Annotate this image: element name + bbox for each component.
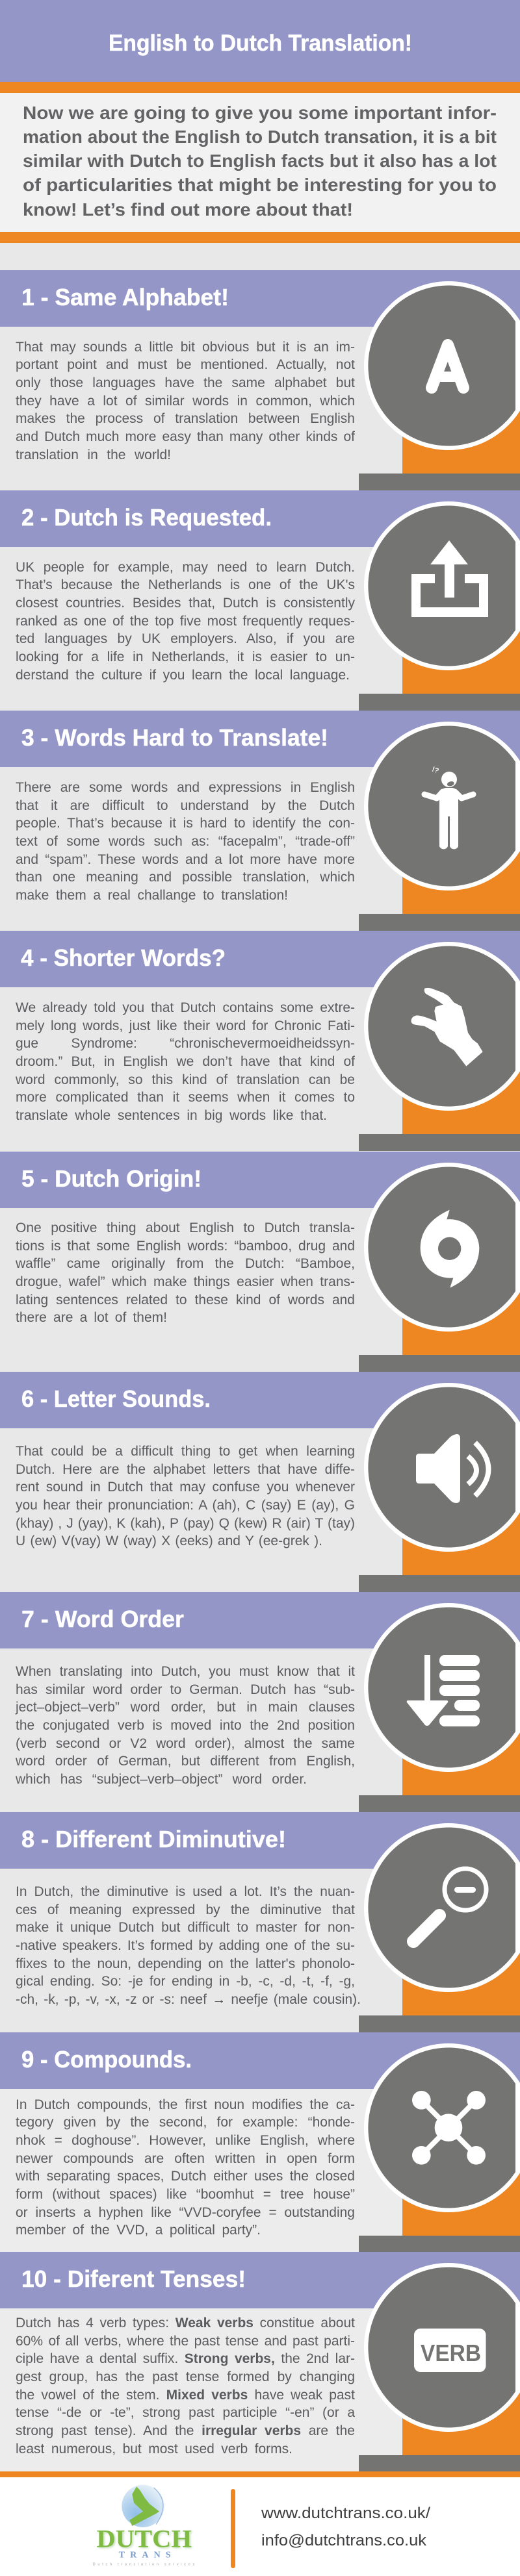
header bar 7 bbox=[0, 1592, 520, 1648]
gray base 2 bbox=[359, 694, 520, 711]
icon: pinching hand bbox=[364, 942, 520, 1111]
logo: Dutch Trans bbox=[93, 2485, 195, 2566]
body text 1: and Dutch much more easy than many other kinds of bbox=[16, 429, 355, 444]
body text 7: ject–object–verb” word order, but in main clauses bbox=[16, 1700, 355, 1715]
gray base 3 bbox=[359, 914, 520, 931]
body text 10: ciple have a dental suffix. Strong verbs, the 2nd lar- bbox=[16, 2351, 355, 2366]
body text 5: lating sentences related to these kind of words and bbox=[16, 1293, 355, 1307]
body text 9: newer compounds are often written in open form bbox=[16, 2151, 355, 2166]
icon: upload bbox=[364, 501, 520, 670]
header bar 10 bbox=[0, 2252, 520, 2308]
body text 7 bbox=[16, 1664, 355, 1787]
icon: magnifier minus bbox=[364, 1823, 520, 1992]
body text 8: make it unique Dutch but difficult to master for non- bbox=[16, 1920, 355, 1935]
body text 6: you hear their pronunciation: A (ah), C (say) E (ay), G bbox=[16, 1498, 355, 1513]
intro text: mation about the English to Dutch transation, it is a bit bbox=[23, 127, 497, 147]
orange pedestal 7 bbox=[402, 1683, 520, 1795]
body text 8: -ch, -k, -p, -v, -x, -z or -s: neef → neefje (male cousin). bbox=[16, 1992, 361, 2007]
body text 1: makes the process of translation between English bbox=[16, 411, 355, 426]
body text 4: We already told you that Dutch contains some extre- bbox=[16, 1000, 355, 1015]
body text 4: translate whole sentences in big words like that. bbox=[16, 1108, 327, 1123]
body text 6: That could be a difficult thing to get when learning bbox=[16, 1444, 355, 1459]
panel: 2 dutch is requested bbox=[0, 490, 520, 711]
title banner bbox=[0, 0, 520, 82]
body text 6 bbox=[16, 1444, 355, 1548]
intro text bbox=[23, 103, 497, 220]
body text 9: tegory given by the second, for example: “honde- bbox=[16, 2115, 355, 2130]
body text 4: word commonly, so this kind of translation can be bbox=[16, 1072, 355, 1087]
orange pedestal 1 bbox=[402, 361, 520, 474]
panel: 10 different tenses bbox=[0, 2252, 520, 2472]
body text 1: portant point and must be mentioned. Actually, not bbox=[16, 357, 355, 372]
contact details: www.dutchtrans.co.uk/ bbox=[261, 2505, 430, 2522]
body text 9: form (without spaces) like “boomhut = tree house” bbox=[16, 2187, 355, 2202]
body text 10: least numerous, but most used verb forms. bbox=[16, 2442, 292, 2456]
body text 6: U (ew) V(vay) W (way) X (eeks) and Y (ee-grek ). bbox=[16, 1534, 322, 1548]
body text 10: gest group, has the past tense formed by changing bbox=[16, 2369, 355, 2384]
logo: Dutch Trans: DUTCH bbox=[96, 2525, 192, 2553]
heading 7: 7 - Word Order bbox=[21, 1606, 184, 1632]
body text 8: gical ending. So: -je for ending in -b, -c, -d, -t, -f, -g, bbox=[16, 1974, 355, 1989]
intro text: Now we are going to give you some important infor- bbox=[23, 103, 497, 123]
heading 10: 10 - Diferent Tenses! bbox=[21, 2266, 246, 2292]
heading 3: 3 - Words Hard to Translate! bbox=[21, 724, 328, 751]
body text 2: ranked as one of the top five most frequently reques- bbox=[16, 614, 355, 629]
body text 8: -native speakers. It’s formed by adding one of the su- bbox=[16, 1938, 355, 1953]
body text 7: which has “subject–verb–object” word order. bbox=[16, 1772, 307, 1787]
body text 10: 60% of all verbs, where the past tense and past parti- bbox=[16, 2334, 355, 2349]
icon: speaker bbox=[364, 1383, 520, 1552]
body text 9: nhok = doghouse”. However, unlike English, where bbox=[16, 2133, 355, 2148]
intro text: of particularities that might be interesting for you to bbox=[23, 175, 497, 195]
gray base 8 bbox=[359, 2015, 520, 2032]
body text 3 bbox=[16, 780, 355, 903]
orange pedestal 3 bbox=[402, 802, 520, 914]
icon: origin swirl bbox=[364, 1163, 520, 1332]
gray base 1 bbox=[359, 474, 520, 490]
body text 3: make them a real challange to translation! bbox=[16, 888, 288, 903]
icon: sort list bbox=[364, 1603, 520, 1772]
body text 3: There are some words and expressions in English bbox=[16, 780, 355, 795]
body text 8: ces of meaning expressed by the diminutive that bbox=[16, 1902, 355, 1917]
body text 7: the conjugated verb is moved into the 2nd position bbox=[16, 1718, 355, 1733]
gray base 4 bbox=[359, 1134, 520, 1151]
body text 5: there are a lot of them! bbox=[16, 1310, 167, 1325]
heading 6: 6 - Letter Sounds. bbox=[21, 1385, 211, 1412]
panel: intro background bbox=[0, 93, 520, 232]
logo: Dutch Trans: Dutch translation services bbox=[93, 2562, 195, 2566]
body text 9 bbox=[16, 2097, 355, 2238]
body text 1: That may sounds a little bit obvious but it is an im- bbox=[16, 339, 355, 355]
body text 1 bbox=[16, 339, 355, 462]
panel: 9 compounds bbox=[0, 2032, 520, 2253]
body text 5: tions is that some English words: “bamboo, drug and bbox=[16, 1239, 355, 1254]
body text 4 bbox=[16, 1000, 355, 1123]
header bar 8 bbox=[0, 1812, 520, 1869]
body text 9: In Dutch compounds, the first noun modifies the ca- bbox=[16, 2097, 355, 2112]
body text 10: tense “-de or -te”, strong past participle “-en” (or a bbox=[16, 2405, 355, 2420]
body text 2 bbox=[16, 560, 355, 683]
heading 5: 5 - Dutch Origin! bbox=[21, 1165, 202, 1192]
body text 6: (khay) , J (yay), K (kah), P (pay) Q (kew) R (air) T (tay) bbox=[16, 1516, 355, 1531]
body text 5 bbox=[16, 1220, 355, 1325]
intro text: know! Let’s find out more about that! bbox=[23, 199, 353, 220]
panel: 5 dutch origin bbox=[0, 1152, 520, 1372]
body text 4: droom.” But, in English we don’t have that kind of bbox=[16, 1054, 355, 1069]
header bar 6 bbox=[0, 1372, 520, 1428]
gray base 5 bbox=[359, 1355, 520, 1372]
body text 3: than one meaning and possible translation, which bbox=[16, 870, 355, 885]
panel: 6 letter sounds bbox=[0, 1372, 520, 1592]
body text 2: ted languages by UK employers. Also, if you are bbox=[16, 631, 355, 646]
panel: 8 different diminutive bbox=[0, 1812, 520, 2032]
body text 3: people. That’s because it is hard to identify the con- bbox=[16, 816, 355, 831]
body text 9: with separating spaces, Dutch either uses the closed bbox=[16, 2169, 355, 2184]
icon: verb badge: VERB bbox=[421, 2340, 481, 2366]
orange pedestal 6 bbox=[402, 1463, 520, 1575]
title: English to Dutch Translation! bbox=[109, 31, 412, 56]
contact details: info@dutchtrans.co.uk bbox=[261, 2532, 427, 2549]
body text 10: the vowel of the stem. Mixed verbs have weak past bbox=[16, 2388, 355, 2403]
orange pedestal 2 bbox=[402, 581, 520, 694]
body text 7: When translating into Dutch, you must know that it bbox=[16, 1664, 355, 1679]
icon: confused person: !? bbox=[431, 766, 440, 775]
header bar 2 bbox=[0, 490, 520, 547]
logo: Dutch Trans: TRANS bbox=[119, 2551, 171, 2560]
heading 4: 4 - Shorter Words? bbox=[21, 944, 226, 971]
panel: 1 same alphabet bbox=[0, 270, 520, 490]
body text 7: word order of German, but different from English, bbox=[16, 1754, 355, 1769]
body text 3: text of some words such as: “facepalm”, “trade-off” bbox=[16, 834, 355, 849]
heading 1: 1 - Same Alphabet! bbox=[21, 284, 229, 310]
body text 5: waffle” came originally from the Dutch: “Bamboe, bbox=[16, 1256, 355, 1271]
body text 8: In Dutch, the diminutive is used a lot. It’s the nuan- bbox=[16, 1884, 355, 1899]
body text 3: that it are difficult to understand by the Dutch bbox=[16, 798, 355, 813]
orange footer rule bbox=[0, 2471, 520, 2477]
body text 9: member of the VVD, a political party”. bbox=[16, 2223, 261, 2238]
orange pedestal 10 bbox=[402, 2343, 520, 2455]
body text 10: Dutch has 4 verb types: Weak verbs constitue about bbox=[16, 2316, 355, 2330]
panel: 3 words hard to translate bbox=[0, 711, 520, 931]
heading 8: 8 - Different Diminutive! bbox=[21, 1826, 286, 1852]
icon: verb badge bbox=[364, 2263, 520, 2432]
heading 2: 2 - Dutch is Requested. bbox=[21, 504, 272, 531]
orange pedestal 8 bbox=[402, 1903, 520, 2015]
body text 4: mely long words, just like their word for Chronic Fati- bbox=[16, 1018, 355, 1033]
body text 7: has similar word order to German. Dutch has “sub- bbox=[16, 1682, 355, 1697]
body text 2: looking for a life in Netherlands, it is easier to un- bbox=[16, 650, 355, 664]
panel: 4 shorter words bbox=[0, 931, 520, 1151]
gray base 7 bbox=[359, 1795, 520, 1812]
body text 4: gue Syndrome: “chronischevermoeidheidssyn- bbox=[16, 1036, 355, 1051]
body text 2: UK people for example, may need to learn Dutch. bbox=[16, 560, 355, 574]
body text 2: closest countries. Besides that, Dutch is consistently bbox=[16, 596, 355, 611]
gray base 9 bbox=[359, 2236, 520, 2253]
orange band bottom bbox=[0, 232, 520, 243]
heading 9: 9 - Compounds. bbox=[21, 2046, 192, 2073]
contact details bbox=[261, 2505, 430, 2549]
panel: footer background bbox=[0, 2477, 520, 2576]
orange pedestal 4 bbox=[402, 1022, 520, 1134]
body text 1: only those languages have the same alphabet but bbox=[16, 375, 355, 390]
body text 2: That’s because the Netherlands is one of the UK's bbox=[16, 577, 355, 592]
panel: 7 word order bbox=[0, 1592, 520, 1812]
body text 10: strong past tense). And the irregular verbs are the bbox=[16, 2423, 355, 2438]
orange pedestal 9 bbox=[402, 2123, 520, 2236]
icon: letter A bbox=[364, 281, 520, 450]
orange band top bbox=[0, 82, 520, 93]
footer divider bbox=[231, 2489, 235, 2568]
icon: network nodes bbox=[364, 2043, 520, 2212]
header bar 5 bbox=[0, 1152, 520, 1208]
body text 5: drogue, wafel” which make things easier when trans- bbox=[16, 1274, 355, 1289]
body text 1: translation in the world! bbox=[16, 448, 171, 462]
body text 1: they have a lot of similar words in common, which bbox=[16, 394, 355, 409]
body text 7: (verb second or V2 word order), almost the same bbox=[16, 1736, 355, 1751]
body text 6: rent sound in Dutch that may confuse you whenever bbox=[16, 1480, 355, 1495]
body text 10 bbox=[16, 2316, 355, 2456]
icon: confused person bbox=[364, 722, 520, 890]
body text 2: derstand the culture if you learn the local language. bbox=[16, 668, 350, 683]
body text 6: Dutch. Here are the alphabet letters that have diffe- bbox=[16, 1462, 355, 1477]
logo: Dutch Trans: DUTCH bbox=[98, 2525, 193, 2554]
orange pedestal 5 bbox=[402, 1243, 520, 1355]
body text 9: or inserts a hyphen like “VVD-coryfee = outstanding bbox=[16, 2205, 355, 2220]
gray base 10 bbox=[359, 2455, 520, 2472]
header bar 3 bbox=[0, 711, 520, 767]
header bar 9 bbox=[0, 2032, 520, 2089]
header bar 1 bbox=[0, 270, 520, 327]
gray base 6 bbox=[359, 1575, 520, 1592]
body text 8: ffixes to the noun, depending on the latter's phonolo- bbox=[16, 1956, 355, 1971]
body text 3: and “spam”. These words and a lot more have more bbox=[16, 852, 355, 867]
header bar 4 bbox=[0, 931, 520, 987]
body text 4: more complicated than it seems when it comes to bbox=[16, 1090, 355, 1105]
body text 8 bbox=[16, 1884, 361, 2007]
intro text: similar with Dutch to English facts but it also has a lot bbox=[23, 151, 497, 171]
body text 5: One positive thing about English to Dutch transla- bbox=[16, 1220, 355, 1235]
